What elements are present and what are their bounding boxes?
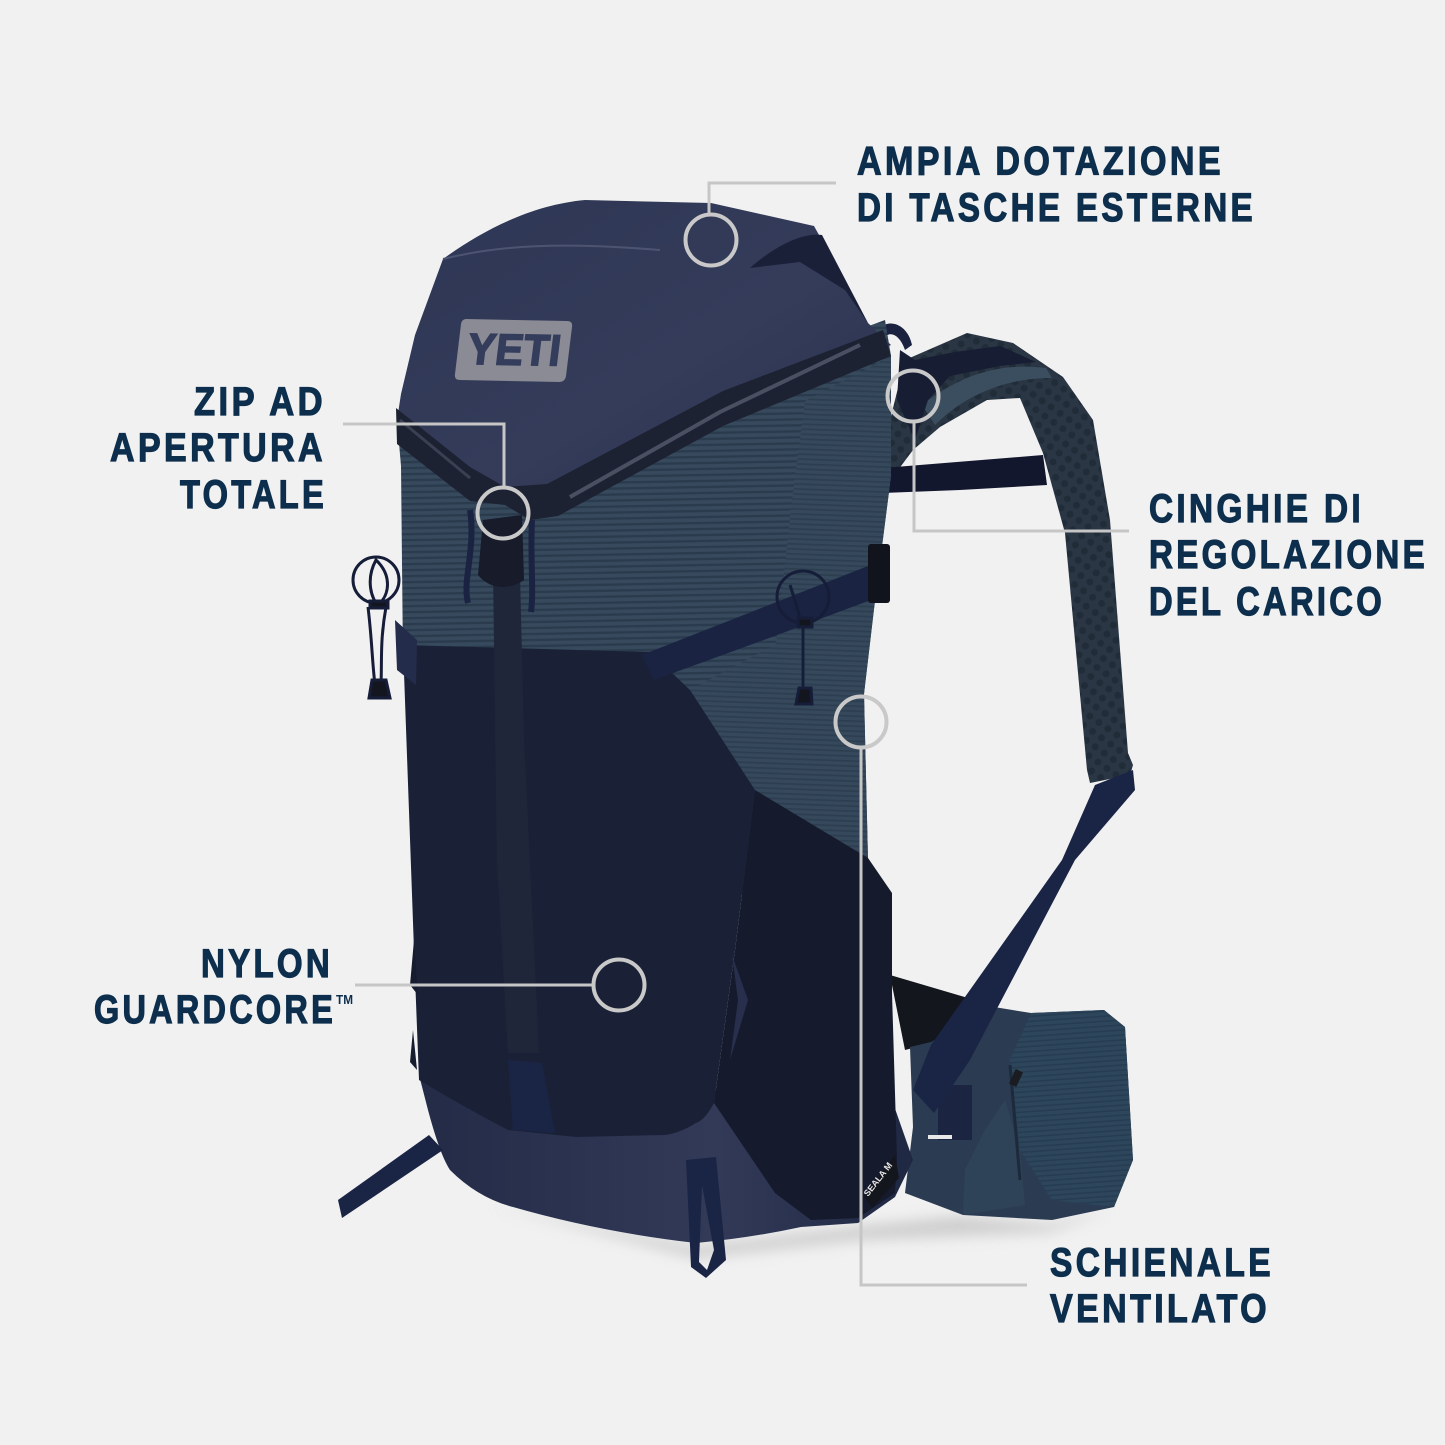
base panel <box>419 1075 913 1243</box>
hip strap <box>913 770 1135 1113</box>
left side strap <box>395 620 417 685</box>
padded strap top band <box>922 367 1052 425</box>
lower left strap <box>338 1135 443 1218</box>
callout: schienale ventilato <box>836 696 1274 1331</box>
callout: ampia dotazione <box>686 140 1256 266</box>
lower front strap <box>508 1060 555 1133</box>
side dark panel <box>714 790 897 1220</box>
callout: nylon guardcore: TM <box>336 992 353 1007</box>
backpack illustration <box>338 200 1135 1278</box>
diagonal zip band <box>396 330 891 520</box>
callout: cinghie di regolazione: DEL CARICO <box>1149 580 1385 624</box>
callout: zip ad apertura totale: ZIP AD <box>194 380 326 424</box>
ground shadow <box>490 1205 1110 1258</box>
zip pull tab <box>478 515 524 587</box>
strap top loop <box>880 323 912 350</box>
left side tabs <box>410 940 418 1070</box>
strap webbing and buckle <box>897 346 1036 440</box>
front strap <box>642 566 876 680</box>
callout: cinghie di regolazione <box>888 370 1428 624</box>
callout: schienale ventilato: VENTILATO <box>1050 1287 1270 1331</box>
main body ribbed panel <box>397 320 891 900</box>
callout: ampia dotazione: DI TASCHE ESTERNE <box>857 186 1256 230</box>
zip highlight <box>570 345 860 497</box>
side compression tabs <box>730 955 748 1060</box>
callout: nylon guardcore: NYLON <box>201 942 333 986</box>
top fold <box>443 246 660 259</box>
callout: ampia dotazione: AMPIA DOTAZIONE <box>857 140 1224 184</box>
top panel <box>397 200 891 505</box>
side ribbed panel <box>690 356 891 860</box>
callout: nylon guardcore: GUARDCORE <box>94 988 336 1032</box>
shoulder strap <box>885 333 1133 783</box>
lower loop strap <box>686 1157 726 1278</box>
top handle <box>750 235 868 323</box>
front dark panel <box>403 645 755 1137</box>
back panel stamp: SEALA M <box>862 1160 894 1198</box>
zip pull cords <box>466 510 532 612</box>
waist pad <box>890 975 968 1050</box>
callout: zip ad apertura totale: TOTALE <box>180 473 327 517</box>
callout: schienale ventilato: SCHIENALE <box>1050 1241 1274 1285</box>
callout: nylon guardcore <box>94 942 644 1032</box>
strap buckle <box>868 544 890 603</box>
front vertical zip <box>493 573 539 1053</box>
right bungee cord <box>777 571 829 704</box>
back panel stamp <box>862 1155 899 1208</box>
hip pack <box>905 1007 1133 1220</box>
callout: zip ad apertura totale: APERTURA <box>110 426 326 470</box>
left bungee cord <box>353 557 399 698</box>
zip left highlight <box>400 420 470 478</box>
callout: zip ad apertura totale <box>110 380 528 538</box>
load adjuster strap <box>883 455 1047 493</box>
YETI logo: YETI <box>465 325 564 376</box>
callout: cinghie di regolazione: CINGHIE DI <box>1149 487 1364 531</box>
